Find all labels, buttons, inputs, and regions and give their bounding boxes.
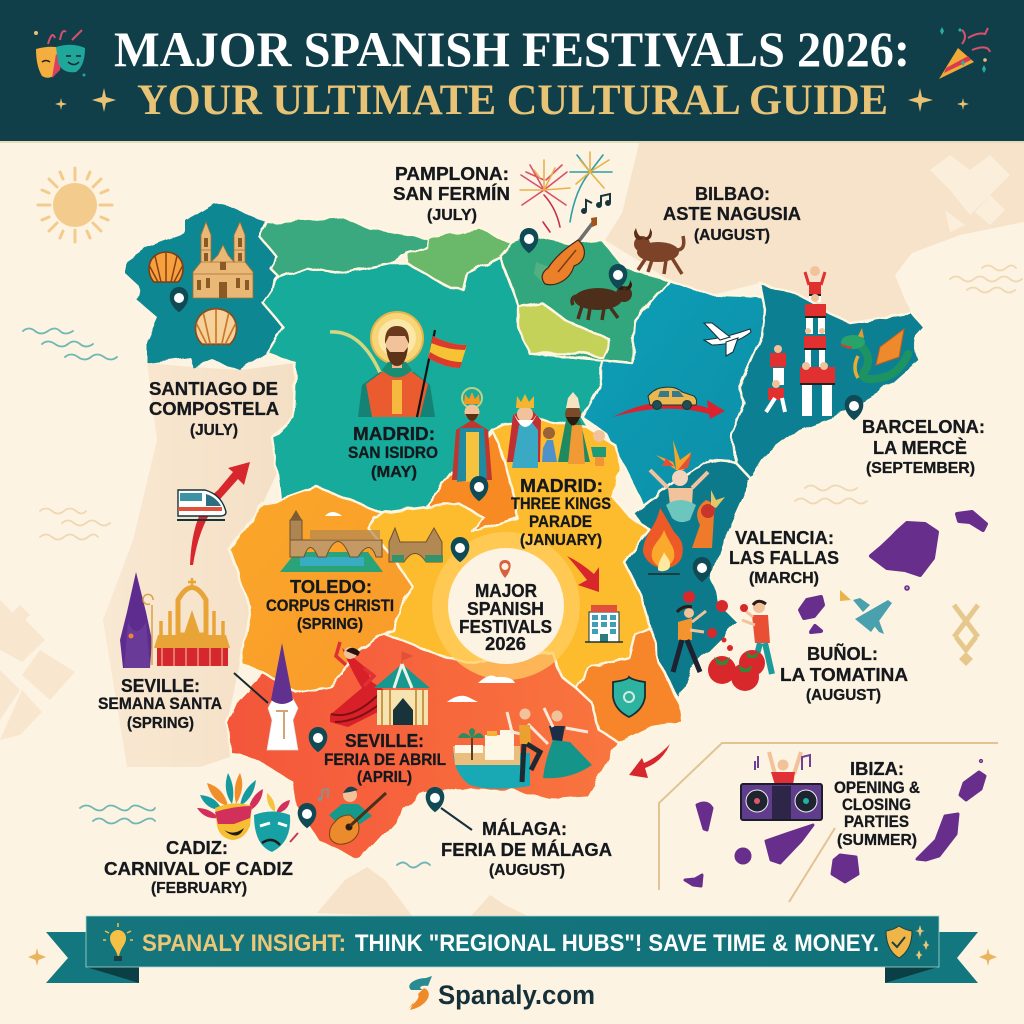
land: France (605, 140, 1024, 322)
label: Ibiza (834, 758, 920, 849)
label: Madrid San Isidro: MADRID: (353, 423, 435, 444)
icon: train (177, 490, 226, 520)
label: Toledo: (SPRING) (297, 616, 363, 633)
arrow: south coast (629, 744, 670, 778)
region: La Rioja (519, 303, 610, 357)
icon: tomatoes (683, 591, 765, 691)
label: Santiago de Compostela (149, 378, 279, 439)
label: Toledo: CORPUS CHRISTI (266, 596, 394, 615)
label: Valencia (729, 527, 839, 587)
banner text: SPANALY INSIGHT: (142, 930, 346, 957)
central title (459, 580, 552, 654)
waves (23, 266, 1022, 868)
icon: music notes (582, 194, 610, 213)
land: North Africa (317, 867, 530, 917)
icon: shield check (886, 925, 930, 960)
label: Ibiza: IBIZA: (850, 758, 904, 779)
icon: scallop shell upper (149, 252, 183, 282)
title line 1: MAJOR SPANISH FESTIVALS 2026: (114, 21, 910, 77)
arrow: train route (190, 462, 250, 565)
map of Spain (125, 203, 924, 858)
canary islands inset frame (659, 743, 998, 902)
label: Barcelona: BARCELONA: (862, 416, 985, 437)
icon: dragon (841, 328, 908, 379)
label: Ibiza: (SUMMER) (837, 832, 917, 849)
pattern: top right geometric (930, 155, 1010, 232)
label: Pamplona: PAMPLONA: (395, 163, 509, 184)
icon: white nazareno (234, 643, 298, 750)
region: Valencia (625, 460, 752, 700)
icon: blue airplane (853, 598, 892, 634)
sun (38, 168, 112, 242)
icon: Three Kings left king (452, 388, 492, 482)
region: Castilla y Leon (263, 257, 602, 513)
label: Malaga: (AUGUST) (489, 862, 565, 879)
central title: FESTIVALS (459, 616, 552, 637)
label: Seville Feria de Abril: FERIA DE ABRIL (324, 750, 446, 769)
label: Valencia: VALENCIA: (735, 527, 834, 548)
pin: central (499, 560, 511, 578)
label: Malaga (441, 818, 612, 879)
label: Ibiza: PARTIES (844, 812, 909, 831)
label: Bunol: BUÑOL: (807, 643, 878, 664)
brand name: Spanaly.com (438, 980, 595, 1010)
label: Bunol: LA TOMATINA (780, 664, 908, 685)
pin: Madrid (471, 477, 487, 500)
pin: Seville (310, 728, 326, 751)
pin: Bilbao (610, 265, 626, 288)
central title: SPANISH (467, 598, 544, 619)
label: Madrid San Isidro (348, 423, 438, 481)
label: Pamplona (393, 163, 510, 224)
label: Seville Semana Santa: (SPRING) (127, 715, 194, 732)
label: Cadiz: CADIZ: (166, 837, 228, 858)
icon: small gold arrow (840, 590, 851, 601)
icon: Tomatina throwers (673, 601, 772, 674)
label: Madrid San Isidro: SAN ISIDRO (348, 443, 438, 462)
icon: dark bull (572, 280, 632, 320)
pin: Pamplona (521, 229, 537, 252)
label: Bilbao: (AUGUST) (694, 227, 770, 244)
region: Asturias (260, 217, 428, 278)
region: Cantabria (407, 228, 512, 290)
icon: castellers human tower (766, 266, 835, 416)
region: Galicia (125, 203, 283, 370)
pin: Santiago (171, 288, 187, 311)
icon: Spanish flag (417, 330, 467, 417)
icon: Toledo gate (389, 528, 443, 562)
label: Cadiz (104, 837, 293, 897)
icon: violin (534, 217, 597, 285)
icon: Semana Santa paso (154, 578, 230, 666)
icon: purple nazareno (120, 572, 153, 668)
icon: light bulb (103, 923, 133, 961)
ornament: gold x (954, 605, 978, 666)
banner (46, 916, 978, 983)
icon: Toledo bridge (280, 510, 383, 572)
label: Valencia: (MARCH) (749, 570, 819, 587)
label: Pamplona: (JULY) (427, 207, 477, 224)
arrow: to hotel (567, 556, 599, 592)
icon: cathedral (193, 222, 253, 298)
central circle (432, 532, 580, 680)
label: Madrid Three Kings (511, 475, 611, 549)
icon: feria tent (374, 652, 430, 725)
header band (0, 0, 1024, 143)
label: Seville Feria de Abril: SEVILLE: (345, 730, 424, 751)
banner ribbon right tail (885, 932, 978, 983)
icon: carnival masks (197, 773, 298, 852)
region: Castilla-La Mancha (370, 417, 652, 687)
pin: Cadiz (299, 804, 315, 827)
banner main panel (86, 916, 939, 967)
label: Madrid San Isidro: (MAY) (371, 464, 417, 481)
icon: Three Kings group (507, 392, 606, 468)
label: Pamplona: SAN FERMÍN (393, 183, 510, 204)
label: Barcelona: (SEPTEMBER) (866, 460, 975, 477)
label: Bilbao: BILBAO: (695, 183, 770, 204)
label: Bunol (780, 643, 908, 704)
label: Ibiza: OPENING & (834, 778, 920, 797)
icon: car and arrow (613, 387, 725, 419)
label: Madrid Three Kings: MADRID: (520, 475, 603, 496)
pin: Valencia (694, 558, 710, 581)
label: Madrid Three Kings: THREE KINGS (511, 494, 611, 513)
icon: Málaga coast (447, 675, 530, 789)
pin: Toledo (452, 538, 468, 561)
central title: 2026 (485, 633, 526, 654)
central title: MAJOR (475, 580, 537, 601)
region: Basque Country and Navarre (500, 235, 669, 363)
icon: party popper (939, 27, 990, 79)
label: Toledo: TOLEDO: (290, 576, 372, 597)
icon: San Isidro saint (330, 312, 467, 417)
banner: THINK "REGIONAL HUBS"! SAVE TIME & MONEY. (355, 930, 879, 957)
balearic islands (800, 512, 986, 632)
canary islands (685, 760, 985, 886)
label: Barcelona: LA MERCÈ (873, 437, 967, 458)
icon: bonfire (643, 508, 683, 574)
stars right (908, 88, 969, 112)
icon: flamenco dancer (330, 642, 387, 727)
icon: Las Fallas figure (650, 440, 725, 548)
pin: Malaga with leader (427, 788, 472, 830)
label: Cadiz: (FEBRUARY) (151, 880, 247, 897)
label: Cadiz: CARNIVAL OF CADIZ (104, 858, 293, 879)
label: Bilbao: ASTE NAGUSIA (663, 203, 801, 224)
region: Extremadura (230, 487, 413, 693)
label: Seville Semana Santa: SEVILLE: (121, 675, 200, 696)
label: Madrid Three Kings: (JANUARY) (520, 532, 602, 549)
label: Malaga: MÁLAGA: (482, 818, 567, 839)
stars left (55, 88, 116, 112)
label: Malaga: FERIA DE MÁLAGA (441, 839, 612, 860)
label: Ibiza: CLOSING (842, 795, 911, 814)
label: Seville Feria de Abril (324, 730, 446, 786)
label: Santiago de Compostela: SANTIAGO DE (149, 378, 278, 399)
label: Barcelona (862, 416, 985, 477)
pattern: left geometric (0, 600, 75, 740)
label: Santiago de Compostela: COMPOSTELA (149, 398, 279, 419)
icon: Spanaly S mark (408, 976, 432, 1010)
region: Aragon (582, 280, 765, 510)
label: Santiago de Compostela: (JULY) (190, 422, 238, 439)
icon: DJ (741, 752, 822, 820)
icon: brown bull (634, 228, 684, 274)
region: Andalusia (227, 633, 619, 858)
stars near banner (28, 948, 997, 966)
label: Valencia: LAS FALLAS (729, 547, 839, 568)
pin: Barcelona (846, 396, 862, 419)
icon: shield (613, 677, 645, 717)
label: Madrid Three Kings: PARADE (529, 512, 592, 531)
label: Seville Semana Santa: SEMANA SANTA (98, 694, 222, 713)
label: Seville Feria de Abril: (APRIL) (357, 769, 412, 786)
footer logo (408, 976, 595, 1010)
icon: dancers (507, 708, 592, 782)
icon: scallop shell lower (195, 309, 237, 344)
banner ribbon left tail (46, 932, 139, 983)
title line 2: YOUR ULTIMATE CULTURAL GUIDE (137, 77, 888, 124)
region: Madrid (427, 432, 517, 532)
icon: fireworks (520, 152, 612, 232)
icon: airplane white (704, 323, 751, 356)
icon: hotel (585, 605, 623, 642)
icon: guitar player (318, 787, 386, 844)
label: Bunol: (AUGUST) (806, 687, 881, 704)
label: Toledo (266, 576, 394, 633)
label: Bilbao (663, 183, 801, 244)
region: Catalonia (732, 283, 924, 480)
label: Seville Semana Santa (98, 675, 222, 732)
icon: theatre masks (34, 30, 86, 78)
land: Portugal (103, 363, 316, 767)
region: Murcia (575, 630, 682, 743)
